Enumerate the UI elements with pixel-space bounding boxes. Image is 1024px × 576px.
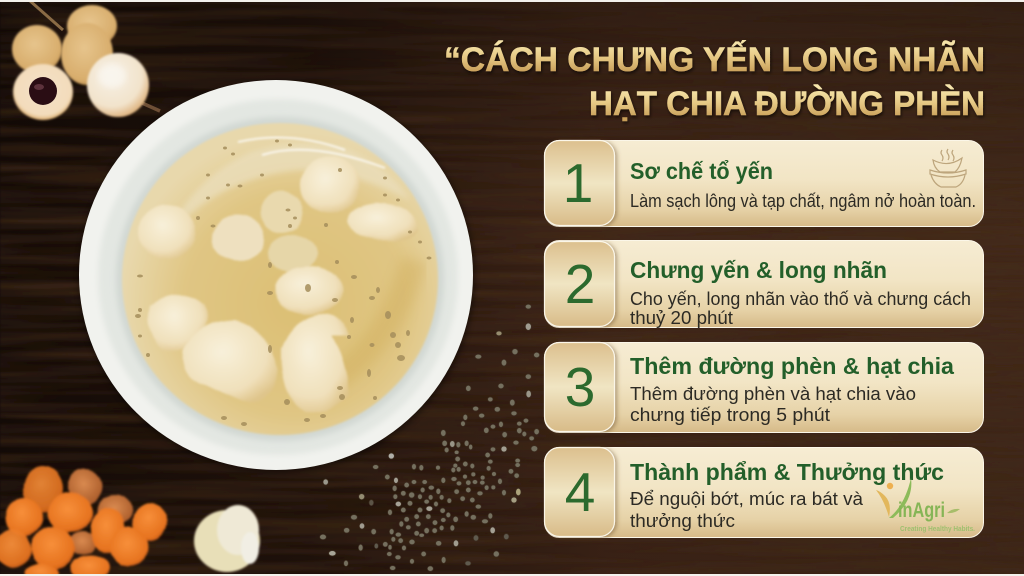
card body [544,448,984,538]
step heading: Thêm đường phèn & hạt chia [630,353,954,379]
bowl of bird's nest longan soup [79,80,475,473]
title line 2: HẠT CHIA ĐƯỜNG PHÈN [589,85,985,123]
whole longan centre [61,23,113,85]
step description: Làm sạch lông và tạp chất, ngâm nở hoàn toàn. [630,191,976,211]
step 2 card [544,240,984,328]
step heading: Thành phẩm & Thưởng thức [630,459,944,485]
number badge: 4 [565,461,595,523]
step description: Thêm đường phèn và hạt chia vào [630,384,916,404]
step description [630,489,864,531]
number badge [544,448,614,536]
number badge [544,342,614,432]
icon: steaming bowl [930,149,966,187]
number badge [544,242,614,326]
number badge [544,140,614,226]
step 1 card [544,140,984,226]
step description [630,384,916,425]
step 3 card [544,342,984,432]
stem [29,0,63,30]
logo: VinAgri [876,478,975,533]
dried longan pile, bottom left [0,466,167,576]
card body [544,140,984,226]
whole longan left [12,25,62,73]
whole longan top [67,5,117,47]
card body [544,342,984,432]
logo: VinAgri: inAgri [898,499,945,522]
step description: Cho yến, long nhãn vào thố và chưng cách [630,289,971,309]
chia seeds scattered on table [320,304,540,571]
step description: thưởng thức [630,511,735,531]
longan flesh pieces [138,156,417,412]
title line 1: “CÁCH CHƯNG YẾN LONG NHÃN [444,41,985,79]
step description: Để nguội bớt, múc ra bát và [630,489,864,509]
step heading: Sơ chế tổ yến [630,158,773,184]
number badge: 3 [565,356,595,418]
card body [544,240,984,328]
step 4 card [544,448,984,538]
halved longan with seed [13,64,73,120]
peeled longan, bottom [194,505,260,572]
number badge: 1 [563,152,593,214]
longan fruit cluster, top left [12,0,160,120]
peeled longan [87,53,160,117]
soup surface [122,123,438,435]
bowl body [79,80,475,473]
step description: thuỷ 20 phút [630,308,733,328]
title [444,41,985,123]
step description: chưng tiếp trong 5 phút [630,405,830,425]
chia seeds in soup [135,140,432,426]
step description [630,289,971,328]
number badge: 2 [565,253,595,315]
step heading: Chưng yến & long nhãn [630,257,887,283]
logo: VinAgri: Creating Healthy Habits. [900,526,975,533]
